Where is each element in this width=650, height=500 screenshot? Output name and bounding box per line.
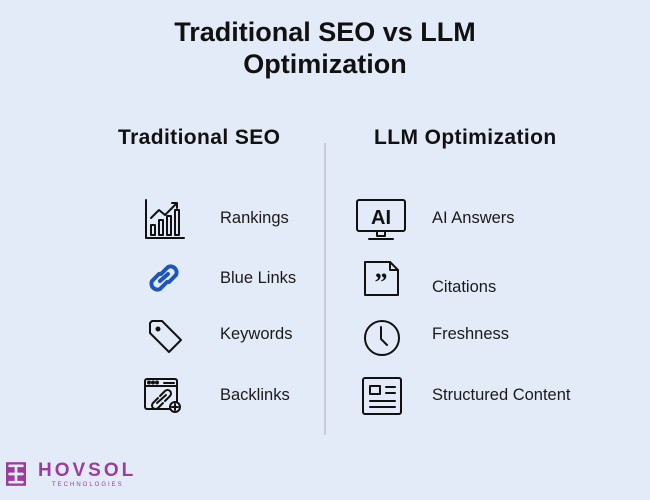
label: citations: Citations xyxy=(432,278,496,296)
label: keywords: Keywords xyxy=(220,325,292,343)
label: rankings: Rankings xyxy=(220,209,289,227)
label: structured content: Structured Content xyxy=(432,386,570,404)
label: blue links: Blue Links xyxy=(220,269,296,287)
icon: AI monitor xyxy=(356,199,406,240)
icon: rankings chart xyxy=(145,199,185,239)
heading: llm optimization: LLM Optimization xyxy=(374,126,557,149)
icon: structured content xyxy=(362,377,402,415)
logo: TECHNOLOGIES xyxy=(52,482,124,488)
icon: citations xyxy=(364,261,399,297)
icon: backlinks xyxy=(144,378,181,413)
title: Optimization xyxy=(243,49,407,79)
label: freshness: Freshness xyxy=(432,325,509,343)
title xyxy=(174,17,476,79)
icon: blue links xyxy=(149,264,178,292)
icon: tag xyxy=(149,320,182,353)
icon: AI monitor: AI xyxy=(371,207,391,229)
logo: HOVSOL xyxy=(38,460,136,481)
icon: citations: ” xyxy=(374,268,388,297)
icon: clock xyxy=(364,320,400,356)
label: backlinks: Backlinks xyxy=(220,386,290,404)
title: Traditional SEO vs LLM xyxy=(174,17,476,47)
divider xyxy=(324,143,326,435)
label: AI answers: AI Answers xyxy=(432,209,515,227)
heading: traditional seo: Traditional SEO xyxy=(118,126,280,149)
logo xyxy=(6,460,136,488)
